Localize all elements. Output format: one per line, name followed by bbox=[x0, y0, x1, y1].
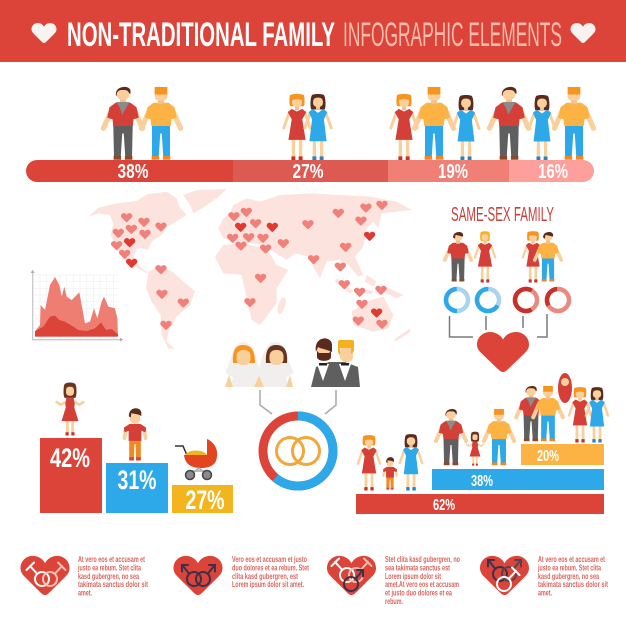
text block 1: justo ea rebum. Stet clita bbox=[77, 564, 141, 572]
family: two fathers and daughter bbox=[436, 409, 514, 466]
stair bar chart bbox=[356, 444, 604, 514]
text block 4: kasd gubergren, no sea bbox=[538, 572, 599, 581]
icon: right heart bbox=[570, 23, 596, 43]
podium bar chart bbox=[40, 438, 233, 515]
podium bar chart: 42% bbox=[50, 443, 90, 473]
text block 2 bbox=[232, 555, 309, 589]
brides bbox=[225, 342, 294, 387]
20 percent bar bbox=[521, 444, 604, 465]
stair bar chart: 20% bbox=[537, 448, 559, 465]
text block 2: Vero eos et accusam et justo bbox=[232, 555, 307, 564]
ring charts bbox=[446, 285, 573, 315]
world map with hearts bbox=[88, 189, 412, 349]
42 percent bar bbox=[40, 438, 102, 513]
text block 3: rebum. bbox=[385, 597, 403, 606]
text block 3: amet.At vero eos et accusam bbox=[385, 580, 459, 589]
info block 3 bbox=[327, 555, 460, 606]
text block 1 bbox=[77, 555, 148, 598]
text block 1: takimata sanctus dolor sit bbox=[78, 580, 148, 589]
text block 2: clita kasd gubergren, est bbox=[232, 572, 298, 581]
icon: heart with two female symbols bbox=[20, 556, 70, 595]
text block 3 bbox=[385, 555, 460, 606]
connector lines to heart bbox=[450, 314, 547, 337]
top people row bbox=[104, 87, 594, 160]
icon: wedding rings bbox=[276, 438, 320, 464]
donut chart bbox=[263, 416, 333, 486]
31 percent bar bbox=[106, 463, 168, 513]
info block 1 bbox=[20, 555, 148, 598]
text block 1: At vero eos et accusam et bbox=[78, 555, 145, 564]
family: two mothers and son bbox=[358, 434, 422, 490]
boy on podium bbox=[124, 408, 146, 460]
big heart bbox=[477, 332, 529, 372]
same-sex family heading: SAME-SEX FAMILY bbox=[451, 204, 554, 226]
same-sex couples bbox=[445, 231, 561, 282]
text block 2: Lorem ipsum dolor sit amet. bbox=[232, 580, 304, 589]
text block 3: Stet clita kasd gubergren, no bbox=[385, 555, 460, 564]
icon: left heart bbox=[32, 23, 56, 43]
text block 2: duo dolores et ea rebum. Stet bbox=[232, 564, 309, 572]
icon: heart with male and female symbols bbox=[480, 556, 529, 595]
grooms bbox=[311, 338, 360, 387]
percentage bar: 27% bbox=[292, 161, 324, 183]
text block 3: sea takimata sanctus est bbox=[385, 564, 450, 572]
text block 1: amet. bbox=[78, 588, 92, 598]
27 percent bar bbox=[172, 485, 233, 513]
percentage bar bbox=[26, 160, 594, 183]
podium bar chart: 27% bbox=[186, 485, 224, 515]
percentage bar: 16% bbox=[538, 161, 568, 183]
62 percent bar bbox=[356, 494, 604, 514]
stair bar chart: 38% bbox=[471, 473, 493, 490]
percentage bar: 38% bbox=[118, 161, 149, 183]
icon: swaddled baby bbox=[558, 373, 572, 403]
38 percent bar bbox=[432, 469, 604, 490]
text block 4 bbox=[537, 555, 608, 598]
text block 3: et justo duo dolores et ea bbox=[385, 588, 452, 598]
connector lines to donut bbox=[260, 390, 336, 414]
stair bar chart: 62% bbox=[433, 497, 455, 514]
header banner bbox=[0, 0, 626, 62]
info block 4 bbox=[480, 555, 608, 598]
title: NON-TRADITIONAL FAMILY bbox=[67, 16, 335, 54]
girl on podium bbox=[57, 382, 83, 435]
area chart bbox=[31, 270, 123, 342]
info block 2 bbox=[174, 555, 309, 595]
icon: heart with mixed symbols bbox=[327, 556, 376, 595]
icon: stroller bbox=[175, 439, 217, 480]
family: couples and baby bbox=[516, 373, 608, 442]
text block 4: amet. bbox=[538, 588, 552, 598]
text block 1: kasd gubergren, no sea bbox=[78, 572, 139, 581]
icon: heart with two male symbols bbox=[174, 556, 222, 595]
percentage bar: 19% bbox=[438, 161, 468, 183]
podium bar chart: 31% bbox=[118, 465, 156, 495]
text block 3: Lorem ipsum dolor sit bbox=[385, 572, 441, 581]
